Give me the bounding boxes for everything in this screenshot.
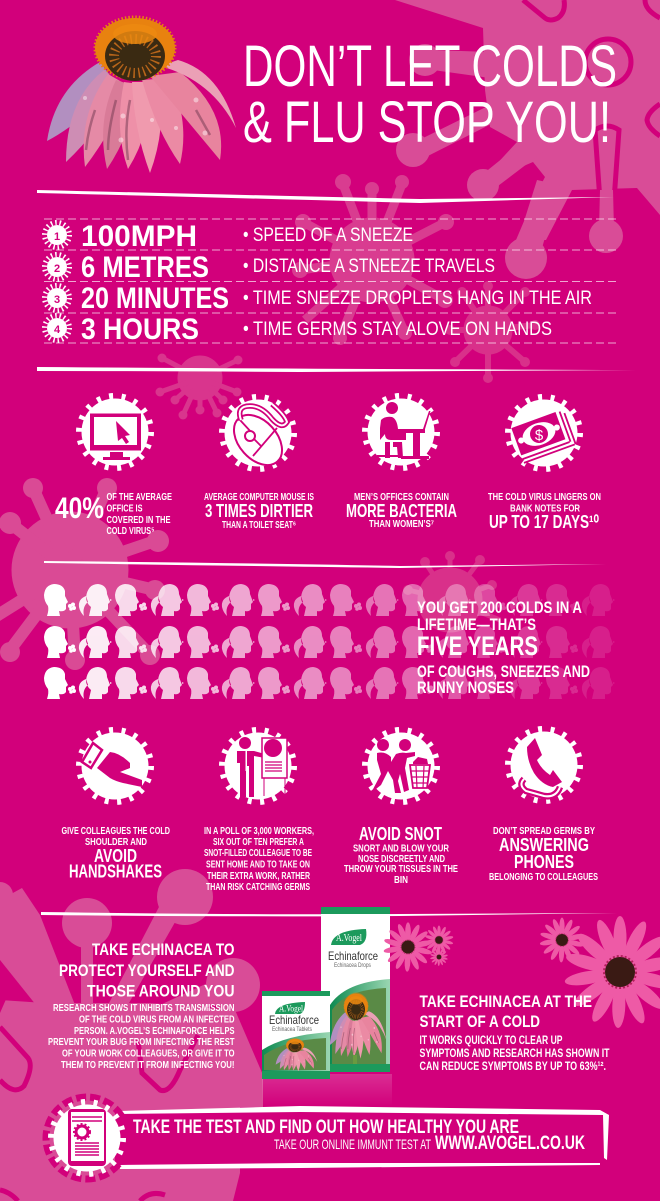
product: Echinaforce tablets box: Echinaforce: [269, 1013, 319, 1027]
text: poll of workers: SIX OUT OF TEN PREFER A: [213, 837, 304, 848]
product: Echinaforce tablets box: Echinacea Tablets: [272, 1027, 312, 1033]
text: answering phones: BELONGING TO COLLEAGUES: [489, 872, 598, 883]
icon: bank notes: $: [535, 427, 544, 444]
background: large virus top right: [395, 0, 660, 279]
col 4 text: bank notes: [488, 492, 601, 532]
product: Echinaforce drops box: [321, 907, 390, 1072]
text: take echinacea at the start: START OF A COLD: [420, 1012, 540, 1031]
banner text: TAKE THE TEST AND FIND OUT HOW HEALTHY YOU ARE: [133, 1117, 519, 1138]
text: avoid snot: BIN: [394, 875, 408, 886]
text: take echinacea to protect: OF YOUR WORK COLLEAGUES, OR GIVE IT TO: [62, 1048, 235, 1060]
stat 1: 100mph: • SPEED OF A SNEEZE: [243, 225, 413, 246]
stat 1: 100mph: [44, 220, 413, 253]
background: large virus bottom left: [0, 869, 263, 1201]
text: avoid snot: AVOID SNOT: [359, 824, 442, 844]
col 2 text: computer mouse: THAN A TOILET SEAT⁶: [222, 520, 296, 531]
stat 3: 20 minutes: 20 MINUTES: [81, 282, 229, 315]
col 4 text: bank notes: UP TO 17 DAYS¹⁰: [489, 512, 599, 532]
divider stroke 3: [44, 561, 606, 568]
col 1 text: 40 percent: OFFICE IS: [106, 504, 143, 514]
stat 2: 6 metres: 2: [54, 263, 60, 275]
text: avoid snot: [344, 824, 458, 886]
col 2 text: computer mouse: [204, 492, 314, 531]
text: avoid handshakes: GIVE COLLEAGUES THE COLD: [62, 826, 170, 837]
icon: hand: [79, 730, 151, 802]
stat 2: 6 metres: 6 METRES: [81, 251, 209, 284]
icon: man at office desk: [365, 396, 437, 468]
stat 4: 3 hours: • TIME GERMS STAY ALOVE ON HANDS: [243, 319, 552, 340]
icon: presenter at board: [222, 730, 294, 802]
col 4 text: bank notes: BANK NOTES FOR: [510, 504, 581, 514]
col 3 text: bacteria: MEN’S OFFICES CONTAIN: [354, 492, 449, 503]
text: take echinacea to protect: PREVENT YOUR BUG FROM INFECTING THE REST: [48, 1037, 234, 1048]
five years text: [417, 598, 590, 697]
icon: smartphone test: [46, 1097, 128, 1179]
background: virus behind heads right: [403, 551, 500, 632]
icon: computer monitor: [79, 396, 151, 468]
icon: telephone: [508, 729, 580, 801]
stat 1: 100mph: 100MPH: [81, 220, 197, 253]
stat 3: 20 minutes: 3: [54, 294, 60, 306]
background: virus behind stats: [292, 174, 454, 345]
banner text: [133, 1117, 585, 1154]
icon: computer mouse: [222, 397, 294, 474]
text: avoid handshakes: HANDSHAKES: [69, 862, 162, 882]
five years text: YOU GET 200 COLDS IN A: [417, 598, 582, 617]
five years text: RUNNY NOSES: [417, 678, 514, 697]
col 4 text: bank notes: THE COLD VIRUS LINGERS ON: [488, 492, 601, 503]
stat 4: 3 hours: 4: [54, 324, 61, 336]
stat 3: 20 minutes: • TIME SNEEZE DROPLETS HANG IN THE AIR: [243, 288, 592, 309]
divider stroke 4: [41, 912, 617, 916]
icon: bank notes: [508, 397, 580, 469]
text: poll of workers: SENT HOME AND TO TAKE ON: [206, 860, 310, 870]
text: take echinacea at the start: TAKE ECHINACEA AT THE: [420, 992, 592, 1011]
stat 3: 20 minutes: [44, 282, 592, 315]
text: poll of workers: THAN RISK CATCHING GERMS: [206, 882, 310, 893]
col 1 text: 40 percent: OF THE AVERAGE: [106, 492, 172, 503]
text: poll of workers: IN A POLL OF 3,000 WORKERS,: [204, 826, 314, 837]
five years text: LIFETIME—THAT’S: [417, 615, 536, 634]
pink echinacea flowers: [383, 916, 660, 1028]
text: take echinacea to protect: PERSON. A.VOGEL’S ECHINAFORCE HELPS: [74, 1026, 235, 1037]
col 1 text: 40 percent: [55, 492, 172, 537]
banner text: WWW.AVOGEL.CO.UK: [435, 1133, 585, 1154]
background: small virus under stats: [156, 354, 242, 420]
divider stroke 2: [37, 367, 637, 372]
col 3 text: bacteria: [346, 492, 457, 530]
text: take echinacea to protect: THOSE AROUND YOU: [87, 982, 234, 1000]
text: poll of workers: [204, 826, 314, 893]
title: [243, 34, 617, 155]
text: avoid snot: SNORT AND BLOW YOUR: [353, 844, 450, 854]
text: answering phones: [489, 826, 598, 883]
product: Echinaforce tablets box: [262, 991, 330, 1079]
product: Echinaforce tablets box: A.Vogel: [279, 1004, 303, 1014]
banner text: TAKE OUR ONLINE IMMUNT TEST AT: [274, 1136, 431, 1152]
text: take echinacea to protect: THEM TO PREVENT IT FROM INFECTING YOU!: [61, 1060, 234, 1071]
text: take echinacea to protect: OF THE COLD VIRUS FROM AN INFECTED: [79, 1014, 234, 1026]
text: answering phones: PHONES: [514, 852, 574, 872]
col 2 text: computer mouse: 3 TIMES DIRTIER: [205, 501, 313, 521]
text: avoid snot: NOSE DISCREETLY AND: [358, 854, 445, 865]
stat 1: 100mph: 1: [54, 231, 60, 243]
stat 2: 6 metres: [44, 251, 495, 284]
call to action banner: [46, 1097, 609, 1179]
text: take echinacea at the start: IT WORKS QUICKLY TO CLEAR UP: [420, 1033, 562, 1047]
heads pictogram: [44, 584, 615, 699]
text: poll of workers: THEIR EXTRA WORK, RATHER: [207, 871, 311, 882]
stat 4: 3 hours: 3 HOURS: [81, 313, 199, 346]
text: poll of workers: SNOT-FILLED COLLEAGUE TO BE: [204, 848, 312, 859]
text: avoid handshakes: SHOULDER AND: [85, 837, 147, 848]
text: take echinacea at the start: [420, 992, 610, 1073]
text: avoid snot: THROW YOUR TISSUES IN THE: [344, 864, 458, 875]
five years text: OF COUGHS, SNEEZES AND: [417, 662, 590, 681]
icon: people and bin: [365, 730, 437, 802]
product: Echinaforce drops box: Echinaforce: [328, 949, 378, 963]
background: virus left of heads: [0, 478, 169, 670]
text: take echinacea to protect: [48, 940, 235, 1071]
stats panel: [44, 219, 616, 346]
text: take echinacea to protect: PROTECT YOURSELF AND: [59, 961, 234, 980]
text: answering phones: ANSWERING: [499, 835, 589, 855]
product: Echinaforce drops box: Echinacea Drops: [334, 963, 371, 969]
stat 2: 6 metres: • DISTANCE A STNEEZE TRAVELS: [243, 256, 495, 277]
box reflection: [262, 1074, 392, 1106]
divider stroke 1: [37, 190, 614, 203]
text: take echinacea to protect: TAKE ECHINACEA TO: [92, 940, 234, 959]
text: avoid handshakes: [62, 826, 170, 882]
col 1 text: 40 percent: COLD VIRUS⁵: [106, 526, 155, 537]
text: answering phones: DON’T SPREAD GERMS BY: [493, 826, 595, 837]
col 1 text: 40 percent: COVERED IN THE: [106, 515, 171, 526]
echinacea flower: [47, 17, 236, 173]
stat 4: 3 hours: [44, 313, 552, 346]
col 1 text: 40 percent: 40%: [55, 492, 104, 525]
text: take echinacea to protect: RESEARCH SHOWS IT INHIBITS TRANSMISSION: [53, 1003, 234, 1014]
col 3 text: bacteria: MORE BACTERIA: [346, 501, 457, 521]
product: Echinaforce drops box: A.Vogel: [336, 932, 362, 944]
five years text: FIVE YEARS: [417, 631, 538, 661]
col 2 text: computer mouse: AVERAGE COMPUTER MOUSE IS: [204, 492, 314, 503]
text: avoid handshakes: AVOID: [94, 846, 137, 866]
background: small virus right of stats: [445, 281, 540, 383]
col 3 text: bacteria: THAN WOMEN’S⁷: [369, 519, 434, 530]
